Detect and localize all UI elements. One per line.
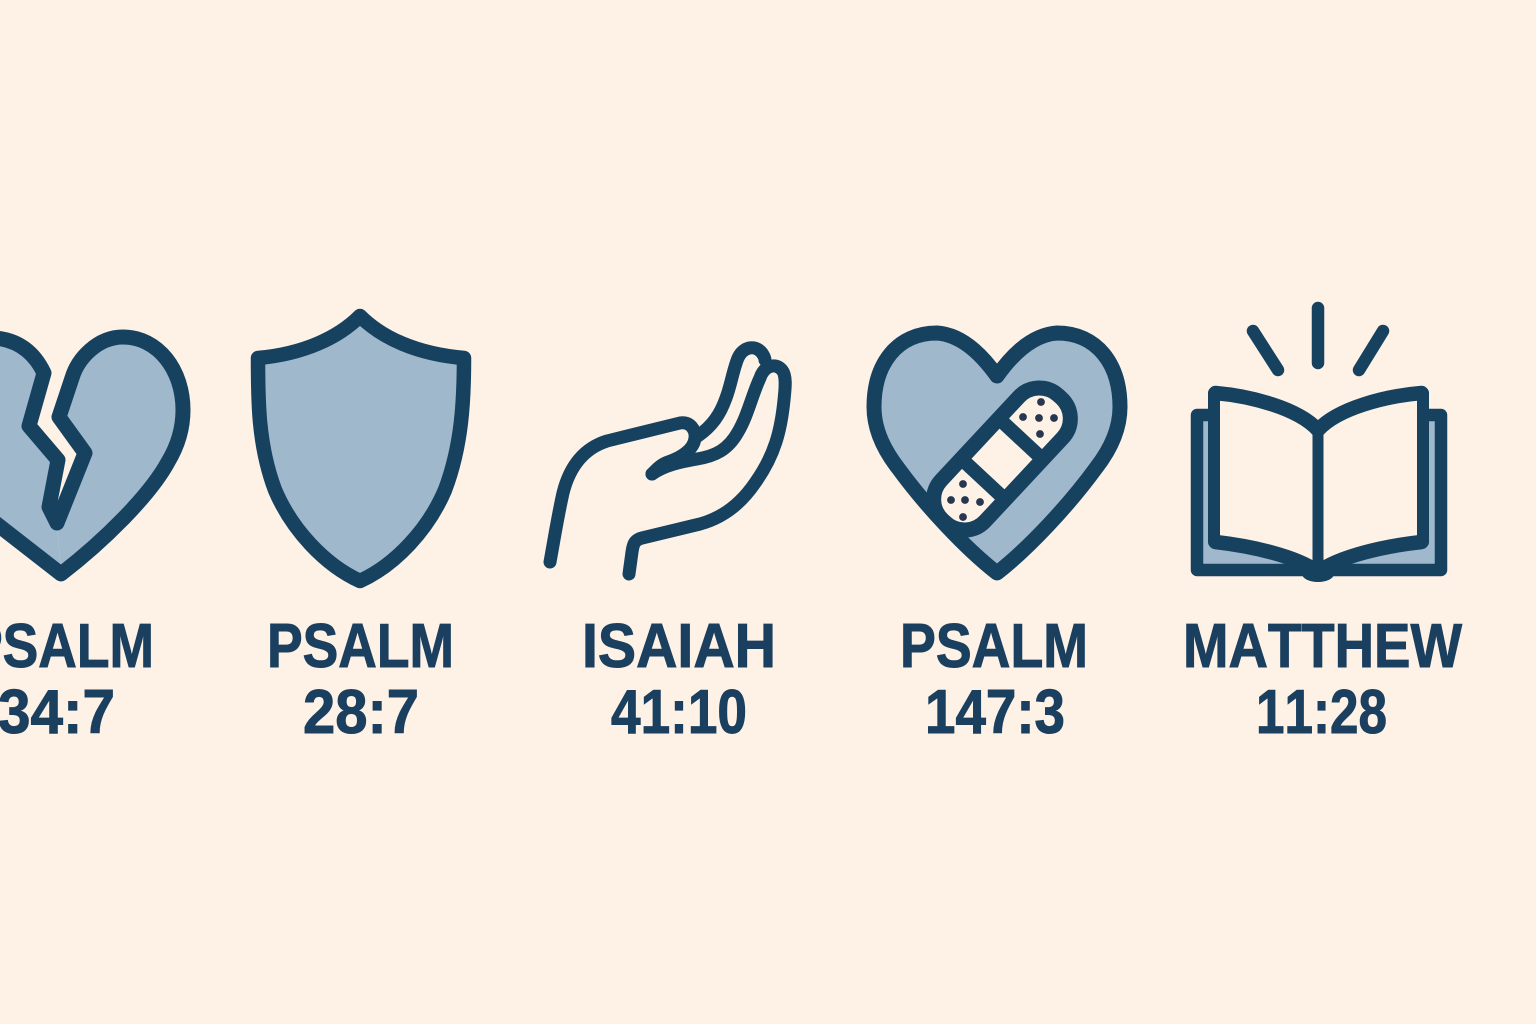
rays xyxy=(1253,308,1383,370)
panel: Matthew 11:28 xyxy=(1183,308,1462,747)
icon: broken heart xyxy=(0,337,183,574)
heart fill halves xyxy=(0,337,183,574)
label: Psalm 147:3 text: PSALM xyxy=(900,612,1088,681)
label: Psalm 28:7 text xyxy=(267,612,454,747)
label: Psalm 147:3 text: 147:3 xyxy=(925,678,1065,747)
label: Isaiah 41:10 text: 41:10 xyxy=(611,678,747,747)
label: Psalm 28:7 text: PSALM xyxy=(267,612,454,681)
panel: Psalm 28:7 xyxy=(258,316,464,747)
heart outline xyxy=(874,333,1120,573)
label: Isaiah 41:10 text xyxy=(582,612,776,747)
icon: open hand xyxy=(550,348,785,574)
label: Psalm 147:3 text xyxy=(900,612,1088,747)
spine xyxy=(1312,428,1324,572)
label: Psalm 28:7 text: 28:7 xyxy=(303,678,419,747)
panel: Psalm 147:3 xyxy=(874,333,1120,747)
panel: Psalm 34:7 xyxy=(0,337,183,747)
pages fill xyxy=(1214,392,1423,572)
icon: heart with bandage xyxy=(874,333,1120,573)
label: Matthew 11:28 text: 11:28 xyxy=(1256,678,1387,747)
icon: open book with rays xyxy=(1197,308,1441,582)
label: Psalm 34:7 text xyxy=(0,612,154,747)
binding bump xyxy=(1302,566,1334,582)
page outlines xyxy=(1214,393,1423,542)
panel: Isaiah 41:10 xyxy=(550,348,785,747)
back cover fill xyxy=(1197,415,1441,570)
label: Matthew 11:28 text: MATTHEW xyxy=(1183,612,1462,681)
heart outline with crack xyxy=(0,337,183,574)
label: Psalm 34:7 text: 34:7 xyxy=(0,678,115,747)
back cover outline xyxy=(1197,415,1441,570)
label: Isaiah 41:10 text: ISAIAH xyxy=(582,612,776,681)
label: Matthew 11:28 text xyxy=(1183,612,1462,747)
bandage dots xyxy=(947,398,1058,521)
icon: shield xyxy=(258,316,464,581)
bandage xyxy=(922,376,1082,542)
